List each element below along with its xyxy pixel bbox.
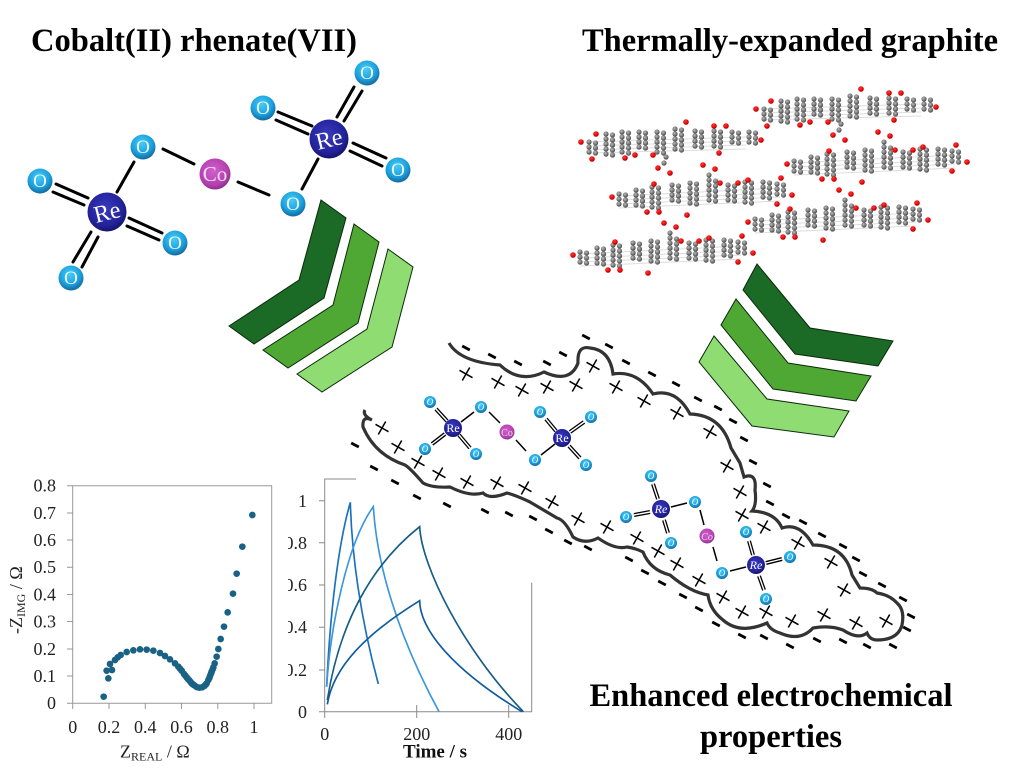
title: Thermally-expanded graphite: Thermally-expanded graphite: [582, 23, 998, 59]
chart: Nyquist impedance plot: 0.7: [34, 503, 56, 523]
small molecule: upper: O: [537, 407, 544, 417]
molecule: cobalt rhenate: O: [256, 98, 270, 119]
chart: Nyquist impedance plot: 0.3: [34, 612, 56, 632]
chart: Nyquist impedance plot: 0.6: [170, 717, 193, 737]
small molecule: upper: Co: [501, 428, 513, 439]
chart: Nyquist impedance plot: [6, 476, 272, 764]
arrow: right green chevrons: [699, 264, 893, 437]
small molecule: upper: O: [478, 402, 485, 412]
small molecule: upper: O: [583, 460, 590, 470]
molecule: cobalt rhenate: [28, 60, 410, 290]
heading: Enhanced electrochemical properties: [590, 678, 952, 755]
chart: Nyquist impedance plot: 0: [68, 717, 77, 737]
small molecule: lower: O: [719, 568, 726, 578]
small molecule: lower: O: [692, 497, 699, 507]
heading: Enhanced electrochemical properties: properties: [700, 719, 842, 755]
chart: Nyquist impedance plot: 0.4: [34, 584, 56, 604]
small molecule: lower: O: [623, 512, 630, 522]
chart: Nyquist impedance plot: 0.5: [34, 557, 56, 577]
chart: galvanostatic charge-discharge curves: [284, 479, 532, 762]
chart: galvanostatic charge-discharge curves: 200: [403, 724, 430, 744]
small molecule: lower: Re: [654, 502, 668, 516]
small molecule: lower: Re: [749, 558, 763, 572]
chart: galvanostatic charge-discharge curves: 1: [298, 491, 307, 511]
chart: galvanostatic charge-discharge curves: 400: [495, 724, 522, 744]
chart: galvanostatic charge-discharge curves: Time / s: [403, 742, 467, 762]
chart: galvanostatic charge-discharge curves: 0.4: [284, 617, 307, 637]
molecule: cobalt rhenate: O: [286, 194, 300, 215]
small molecule: upper: O: [427, 397, 434, 407]
small molecule: lower: [620, 470, 796, 605]
small molecule: upper: O: [473, 449, 480, 459]
small molecule: upper: Re: [555, 431, 569, 445]
small molecule: lower: O: [743, 527, 750, 537]
molecule: cobalt rhenate: O: [33, 171, 47, 192]
small molecule: upper: O: [588, 412, 595, 422]
chart: galvanostatic charge-discharge curves: 0.8: [284, 533, 307, 553]
chart: Nyquist impedance plot: 0.8: [207, 717, 229, 737]
molecule: cobalt rhenate: Re: [313, 124, 345, 156]
chart: galvanostatic charge-discharge curves: 0: [320, 724, 329, 744]
positive charges: [376, 360, 892, 630]
chart: Nyquist impedance plot: 0.8: [34, 476, 56, 496]
negative charges: [351, 335, 915, 648]
small molecule: lower: O: [763, 594, 770, 604]
chart: Nyquist impedance plot: 0.2: [34, 639, 56, 659]
small molecule: lower: O: [668, 538, 675, 548]
small molecule: upper: Re: [446, 421, 460, 435]
molecule: cobalt rhenate: O: [391, 160, 405, 181]
chart: galvanostatic charge-discharge curves: 0.2: [284, 660, 307, 680]
small molecule: upper: [419, 396, 597, 471]
chart: Nyquist impedance plot: IMG: [14, 593, 28, 617]
chart: Nyquist impedance plot: REAL: [131, 750, 162, 764]
title: Cobalt(II) rhenate(VII): Cobalt(II) rhenate(VII): [31, 23, 357, 59]
graphite sheets: [570, 86, 970, 276]
chart: Nyquist impedance plot: -Z: [6, 617, 26, 634]
chart: galvanostatic charge-discharge curves: 0: [298, 702, 307, 722]
molecule: cobalt rhenate: O: [360, 63, 374, 84]
chart: Nyquist impedance plot: Z: [120, 742, 131, 762]
chart: Nyquist impedance plot: 0.2: [98, 717, 120, 737]
molecule: cobalt rhenate: O: [64, 268, 78, 289]
molecule: cobalt rhenate: Re: [91, 197, 123, 229]
chart: Nyquist impedance plot: 0: [47, 693, 56, 713]
molecule: cobalt rhenate: O: [136, 137, 150, 158]
chart: galvanostatic charge-discharge curves: 0.6: [284, 575, 307, 595]
chart: Nyquist impedance plot: 0.6: [34, 530, 56, 550]
small molecule: lower: Co: [701, 532, 713, 543]
heading: Enhanced electrochemical properties: Enhanced electrochemical: [590, 678, 952, 714]
molecule: cobalt rhenate: O: [168, 233, 182, 254]
chart: Nyquist impedance plot: 0.4: [134, 717, 157, 737]
small molecule: upper: O: [532, 455, 539, 465]
molecule: cobalt rhenate: Co: [203, 162, 227, 186]
small molecule: upper: O: [422, 444, 429, 454]
chart: Nyquist impedance plot: 0.1: [34, 666, 56, 686]
chart: Nyquist impedance plot: / Ω: [6, 566, 26, 594]
small molecule: lower: O: [787, 552, 794, 562]
small molecule: lower: O: [648, 471, 655, 481]
composite: graphite outline with charges: [351, 335, 915, 648]
chart: Nyquist impedance plot: / Ω: [162, 742, 190, 762]
arrow: left green chevrons: [229, 200, 413, 392]
chart: Nyquist impedance plot: 1: [250, 717, 258, 737]
